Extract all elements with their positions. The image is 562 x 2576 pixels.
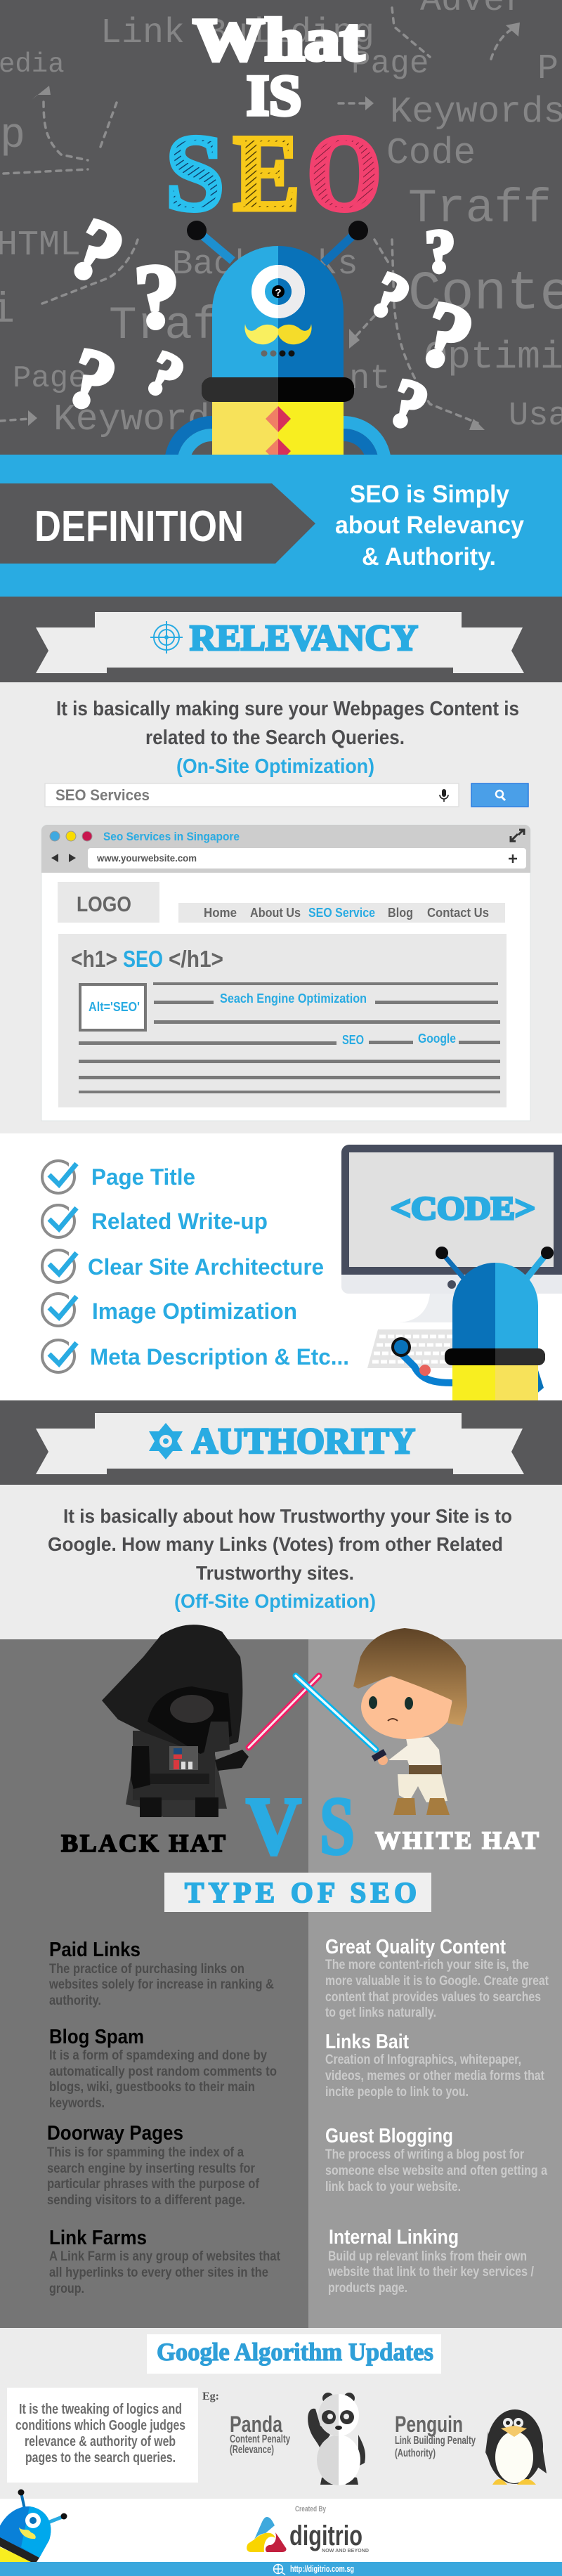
title: IS: IS: [247, 63, 301, 127]
check item: Page Title: Page Title: [91, 1164, 195, 1190]
logo placeholder: LOGO: [77, 892, 131, 916]
authority heading: AUTHORITY: [192, 1422, 415, 1462]
black hat: link farms: [49, 2227, 281, 2296]
black hat: paid links: authority.: [49, 1993, 101, 2008]
black hat: link farms: all hyperlinks to every other sites in the: [49, 2265, 268, 2280]
footer url bar: [0, 2562, 562, 2576]
navigation bar: About Us: [250, 906, 301, 920]
icon: globe: [273, 2565, 285, 2575]
title: SEO: O: [307, 112, 381, 233]
background keywords: Keywords: [390, 91, 562, 133]
background keywords: Link Building: [100, 13, 374, 53]
relevancy heading: RELEVANCY: [190, 618, 418, 658]
page content mock: Alt='SEO': [89, 1000, 140, 1014]
background keywords: Traff: [408, 182, 551, 236]
logo: digitrio wordmark: digitrio: [289, 2520, 362, 2551]
white hat: great quality content: to get links naturally.: [325, 2005, 436, 2020]
relevancy text: related to the Search Queries.: [145, 727, 405, 749]
definition text: about Relevancy: [335, 512, 525, 539]
question marks: ?: [360, 259, 420, 335]
ribbon: [36, 1413, 524, 1474]
white hat: guest blogging: [325, 2125, 547, 2194]
created by: Created By: [295, 2505, 327, 2513]
question marks: ?: [380, 363, 438, 445]
panel: authority text: Google. How many Links (Votes) from other Related: [48, 1533, 503, 1555]
panel: definition: [0, 455, 562, 597]
panel: authority banner: [0, 1400, 562, 1485]
question marks: ?: [424, 216, 457, 285]
logo: tagline: NOW AND BEYOND: [322, 2547, 370, 2554]
ribbon: [36, 612, 524, 673]
title: What: What: [193, 6, 364, 73]
updates description: pages to the search queries.: [25, 2450, 176, 2466]
code label: <CODE>: [391, 1190, 535, 1227]
logo: digitrio mark: [247, 2517, 287, 2552]
check item: Clear Site Architecture: Clear Site Architecture: [88, 1254, 324, 1280]
robot mascot: [171, 221, 385, 505]
black hat: paid links: The practice of purchasing links on: [49, 1962, 244, 1977]
black hat: doorway pages: particular phrases with the purpose of: [47, 2177, 260, 2192]
VS label: S: [320, 1780, 355, 1872]
black hat: doorway pages: search engine by inserting results for: [47, 2161, 256, 2176]
question marks: ?: [56, 329, 128, 431]
check item: Image Optimization: Image Optimization: [92, 1299, 297, 1324]
check item: Meta Description: [42, 1337, 349, 1372]
black hat: blog spam: blogs, wiki, guestbooks to their main: [49, 2080, 255, 2095]
check item: Related Write-up: Related Write-up: [91, 1209, 268, 1234]
background keywords: Backlinks: [172, 245, 358, 284]
robot mascot: ?: [275, 287, 282, 299]
definition heading: DEFINITION: [34, 502, 244, 551]
dashed arrows: [0, 8, 520, 430]
updates heading: Google Algorithm Updates: [157, 2338, 433, 2366]
updates description: It is the tweaking of logics and: [19, 2402, 182, 2417]
page content mock: Seach Engine Optimization: [220, 991, 367, 1006]
black hat: doorway pages: sending visitors to a different page.: [47, 2193, 245, 2208]
browser window: Seo Services in Singapore: [103, 831, 240, 843]
black hat: paid links: Paid Links: [49, 1939, 140, 1961]
panel: authority text: Trustworthy sites.: [196, 1562, 354, 1584]
search box: [45, 783, 528, 807]
black hat: blog spam: [49, 2026, 277, 2111]
black hat: doorway pages: Doorway Pages: [47, 2122, 183, 2145]
black hat: blog spam: automatically post random comments to: [49, 2064, 277, 2079]
white hat: internal linking: Internal Linking: [329, 2226, 459, 2249]
question marks: ?: [132, 245, 183, 349]
panda text: (Relevance): [230, 2444, 274, 2456]
monitor: [341, 1145, 562, 1368]
robot from behind: [393, 1247, 554, 1400]
black hat: doorway pages: This is for spamming the index of a: [47, 2145, 244, 2160]
icon: target: [150, 621, 183, 653]
title: SEO: S: [166, 112, 224, 233]
white hat: links bait: Creation of Infographics, whitepaper,: [325, 2053, 521, 2067]
browser window: [41, 825, 530, 1121]
page content mock: SEO: [342, 1033, 364, 1047]
red lightsaber: [249, 1676, 319, 1748]
white hat: guest blogging: link back to your website.: [325, 2180, 461, 2194]
penguin text: (Authority): [395, 2447, 436, 2459]
check item: Image Optimization: [42, 1291, 297, 1326]
background keywords: Code: [386, 132, 476, 174]
panel: authority text: (Off-Site Optimization): [174, 1590, 376, 1612]
black hat label: BLACK HAT: [61, 1829, 226, 1857]
white hat: links bait: Links Bait: [325, 2031, 409, 2053]
search box: SEO Services: [55, 786, 150, 804]
white hat: great quality content: The more content-rich your site is, the: [325, 1958, 529, 1972]
black hat: paid links: websites solely for increase in ranking &: [48, 1977, 274, 1992]
definition text: & Authority.: [362, 543, 496, 571]
panel: authority text: [0, 1485, 562, 1641]
navigation bar: Contact Us: [427, 906, 489, 920]
white hat: internal linking: Build up relevant links from their own: [328, 2249, 527, 2264]
white hat: guest blogging: Guest Blogging: [325, 2125, 453, 2147]
title: SEO: E: [233, 112, 300, 233]
VS label: V: [246, 1780, 301, 1872]
relevancy text: [56, 698, 519, 778]
background keywords: Optimi: [424, 335, 562, 379]
browser window: www.yourwebsite.com: [96, 852, 197, 864]
white hat: links bait: incite people to link to you.: [325, 2085, 469, 2100]
navigation bar: SEO Service: [308, 906, 375, 920]
white hat: links bait: [325, 2031, 545, 2100]
VS label: [246, 1780, 355, 1872]
background keywords: Keyword: [53, 398, 210, 441]
black hat: blog spam: It is a form of spamdexing and done by: [49, 2048, 267, 2063]
check item: Related Write-up: [42, 1202, 268, 1237]
black hat background: [0, 1639, 308, 2328]
check item: Clear Site Architecture: [42, 1247, 324, 1282]
navigation bar: [178, 903, 505, 923]
question marks: [55, 199, 486, 445]
penguin text: Link Building Penalty: [395, 2435, 476, 2447]
background keywords: Page: [13, 361, 87, 396]
background keywords: Traf: [109, 299, 220, 352]
black hat: link farms: A Link Farm is any group of websites that: [49, 2249, 281, 2264]
question marks: ?: [407, 280, 486, 393]
panel: footer credits: [0, 2489, 562, 2564]
penguin text: Penguin: [395, 2412, 463, 2437]
black hat: link farms: group.: [49, 2282, 84, 2296]
updates description: relevance & authority of web: [25, 2434, 176, 2450]
white hat: great quality content: [325, 1936, 549, 2020]
logo placeholder: [58, 882, 159, 923]
hero panel: [0, 0, 562, 505]
luke skywalker figure: [353, 1628, 467, 1815]
check item: Meta Description: Meta Description & Etc...: [90, 1344, 349, 1370]
white hat label: WHITE HAT: [375, 1826, 539, 1854]
white hat background: [308, 1639, 562, 2328]
panel: relevancy content: [0, 682, 562, 1133]
blue lightsaber: [296, 1676, 385, 1759]
check item: Page Title: [42, 1158, 195, 1193]
panda text: Panda: [230, 2412, 282, 2437]
white hat: internal linking: products page.: [328, 2281, 407, 2296]
black hat: blog spam: Blog Spam: [49, 2026, 144, 2048]
panda text: [230, 2412, 290, 2456]
panel: on-page checklist: [0, 1133, 562, 1400]
background keywords: P: [537, 49, 558, 89]
title: SEO: [166, 112, 381, 233]
icon: penguin: [485, 2409, 547, 2485]
footer url bar: http://digitrio.com.sg: [290, 2563, 354, 2574]
question marks: ?: [135, 338, 194, 412]
question marks: ?: [55, 199, 138, 304]
darth vader figure: [102, 1625, 249, 1817]
eg label: Eg:: [202, 2390, 219, 2402]
relevancy text: (On-Site Optimization): [176, 755, 374, 778]
updates heading: [147, 2334, 441, 2374]
relevancy text: It is basically making sure your Webpages Content is: [56, 698, 519, 720]
icon: panda: [308, 2393, 365, 2485]
white hat: guest blogging: The process of writing a blog post for: [325, 2147, 525, 2162]
black hat: doorway pages: [47, 2122, 260, 2208]
white hat: great quality content: Great Quality Content: [325, 1936, 506, 1958]
page content mock: [58, 934, 507, 1107]
type of seo heading: TYPE OF SEO: [185, 1876, 417, 1908]
background keywords: nt: [349, 359, 391, 398]
definition text: SEO is Simply: [350, 481, 510, 508]
navigation bar: Home: [204, 906, 237, 920]
page content mock: Google: [418, 1032, 456, 1046]
panda text: Content Penalty: [230, 2433, 290, 2445]
robot peeking: [0, 2489, 67, 2564]
background keywords: [0, 0, 562, 441]
panel: authority text: It is basically about how Trustworthy your Site is to: [63, 1505, 512, 1527]
definition arrow: [0, 483, 315, 564]
penguin text: [395, 2412, 476, 2459]
page content mock: SEO: [123, 946, 163, 972]
white hat: internal linking: [327, 2226, 535, 2296]
black hat: blog spam: keywords.: [49, 2096, 105, 2111]
background keywords: edia: [0, 49, 65, 80]
page content mock: </h1>: [169, 946, 223, 972]
updates description: conditions which Google judges: [15, 2418, 185, 2433]
black hat: link farms: Link Farms: [49, 2227, 147, 2249]
panel: google algorithm updates: [0, 2328, 562, 2499]
checklist: [42, 1158, 349, 1372]
panel: black hat vs white hat: [0, 1625, 562, 2328]
background keywords: Page: [351, 46, 429, 82]
panel: relevancy banner: [0, 597, 562, 682]
page content mock: <h1>: [71, 946, 117, 972]
icon: sheriff star: [149, 1423, 183, 1459]
definition text: [335, 481, 525, 571]
background keywords: p: [0, 112, 25, 160]
updates description: [7, 2388, 198, 2483]
navigation bar: Blog: [388, 906, 413, 920]
black hat: paid links: [48, 1939, 274, 2008]
